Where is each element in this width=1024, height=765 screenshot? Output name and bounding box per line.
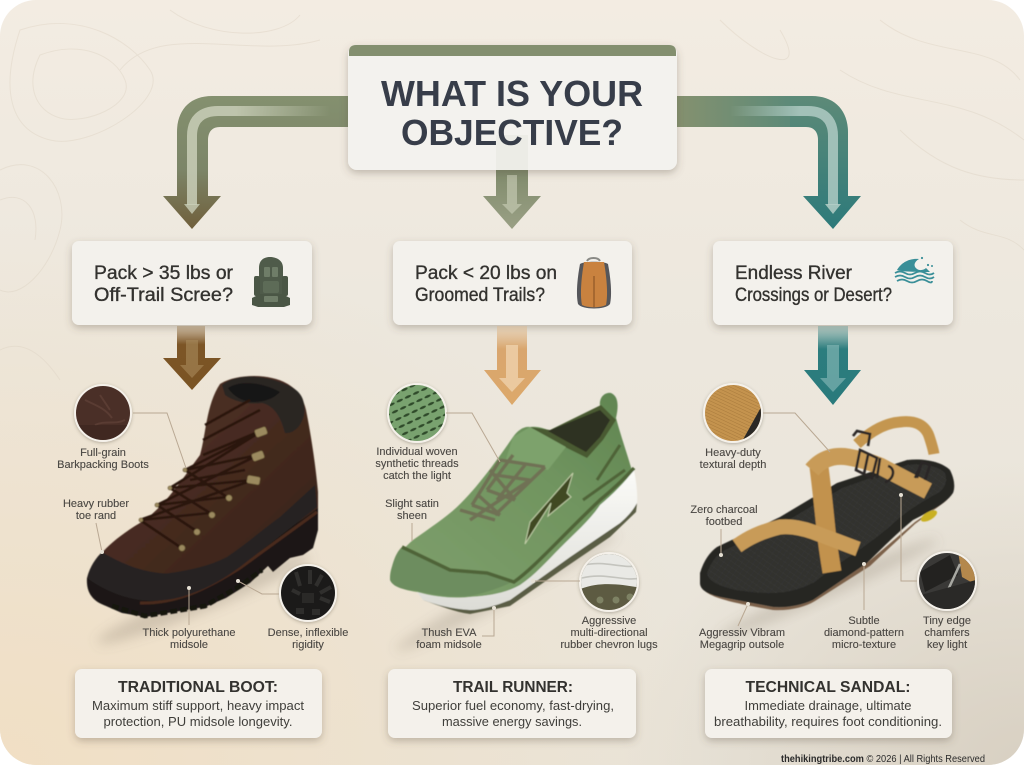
summary card: traditional boot <box>75 669 322 738</box>
title text: WHAT IS YOUR <box>381 73 643 114</box>
question card: heavy pack: Off-Trail Scree? <box>94 285 233 306</box>
detail circle: lugs and foam <box>578 550 642 614</box>
buckle <box>853 431 930 482</box>
boot callout labels: toe rand <box>76 510 116 522</box>
arrow: left branch <box>163 96 348 229</box>
question card: water or desert: Crossings or Desert? <box>735 285 892 306</box>
sandal illustration <box>700 422 954 645</box>
arrow: to trail runner <box>484 326 541 405</box>
heel strap <box>857 422 934 454</box>
tongue <box>505 427 566 470</box>
summary card: trail runner: TRAIL RUNNER: <box>453 679 573 696</box>
trail runner callout labels: foam midsole <box>416 639 482 651</box>
sandal callout labels: footbed <box>706 516 742 528</box>
trail runner callout labels: Slight satin <box>385 498 439 510</box>
boot callout labels: rigidity <box>292 639 324 651</box>
detail circle: leather <box>72 383 134 445</box>
upper <box>390 393 634 598</box>
boot illustration <box>87 376 318 653</box>
boot callout labels <box>57 447 348 651</box>
icon: teal wave <box>895 257 934 282</box>
arrow: centre branch <box>483 165 541 229</box>
leader lines <box>96 413 917 636</box>
sandal callout labels: Zero charcoal <box>690 504 758 516</box>
question card: light pack: Groomed Trails? <box>415 285 545 306</box>
arrow: to boot <box>163 326 221 390</box>
sandal callout labels: micro-texture <box>832 639 896 651</box>
outsole <box>701 496 953 610</box>
detail circle: webbing <box>703 383 765 445</box>
summary card: technical sandal: TECHNICAL SANDAL: <box>746 679 910 696</box>
sandal callout labels: textural depth <box>700 459 766 471</box>
question card: heavy pack <box>72 241 312 325</box>
question card: light pack: Pack < 20 lbs on <box>415 263 557 284</box>
title card <box>348 45 677 170</box>
collar <box>530 405 616 458</box>
boot callout labels: Full-grain <box>80 447 126 459</box>
trail runner callout labels: Thush EVA <box>422 627 477 639</box>
sandal callout labels: Aggressiv Vibram <box>699 627 785 639</box>
icon: orange backpack <box>577 258 611 308</box>
trail runner callout labels: synthetic threads <box>375 458 459 470</box>
summary card: technical sandal: breathability, requires foot conditioning. <box>714 714 942 729</box>
footer credit: thehikingtribe.com © 2026 | All Rights Reserved <box>781 754 985 765</box>
detail circle: woven mesh <box>385 380 449 446</box>
logo <box>919 508 939 524</box>
trail runner callout labels: multi-directional <box>570 627 648 639</box>
sandal callout labels: key light <box>927 639 967 651</box>
boot callout labels: midsole <box>170 639 208 651</box>
midsole <box>417 470 637 610</box>
title card: OBJECTIVE? <box>401 112 623 153</box>
trail runner callout labels: rubber chevron lugs <box>560 639 658 651</box>
sandal callout labels: Megagrip outsole <box>700 639 784 651</box>
boot callout labels: Thick polyurethane <box>143 627 235 639</box>
sandal callout labels: Tiny edge <box>923 615 971 627</box>
summary card: traditional boot: TRADITIONAL BOOT: <box>118 679 278 696</box>
footbed <box>700 459 954 607</box>
boot callout labels: Barkpacking Boots <box>57 459 149 471</box>
question card: heavy pack: Pack > 35 lbs or <box>94 263 234 284</box>
trail runner callout labels <box>375 446 658 651</box>
trail runner callout labels: sheen <box>397 510 427 522</box>
detail circle: edge chamfer <box>917 551 977 611</box>
laces <box>460 455 545 520</box>
icon: green backpack <box>252 257 290 307</box>
toe strap <box>737 527 858 549</box>
summary card: traditional boot: protection, PU midsole longevity. <box>104 714 292 729</box>
summary card: technical sandal: Immediate drainage, ultimate <box>744 698 912 713</box>
boot callout labels: Heavy rubber <box>63 498 129 510</box>
question card: water or desert: Endless River <box>735 263 853 284</box>
question card: light pack <box>393 241 632 325</box>
summary card: technical sandal <box>705 669 952 738</box>
summary card: trail runner: massive energy savings. <box>442 714 582 729</box>
summary card: trail runner <box>388 669 636 738</box>
sandal callout labels: chamfers <box>924 627 970 639</box>
logo <box>525 473 573 544</box>
toe bumper <box>390 547 512 597</box>
sole <box>87 505 318 617</box>
collar <box>222 377 304 433</box>
boot callout labels: Dense, inflexible <box>268 627 348 639</box>
arrow: right branch <box>677 96 861 229</box>
question card: water or desert <box>713 241 953 325</box>
summary card: trail runner: Superior fuel economy, fast-drying, <box>412 698 614 713</box>
arrow: to sandal <box>804 326 861 405</box>
sandal callout labels: Subtle <box>848 615 880 627</box>
sandal callout labels: diamond-pattern <box>824 627 904 639</box>
sandal callout labels: Heavy-duty <box>705 447 761 459</box>
summary card: traditional boot: Maximum stiff support, heavy impact <box>92 698 304 713</box>
trail runner callout labels: Individual woven <box>376 446 458 458</box>
trail runner illustration <box>390 393 637 659</box>
upper <box>90 376 318 588</box>
outsole <box>423 503 637 614</box>
laces and hooks <box>140 400 260 547</box>
heel stripes <box>583 445 625 500</box>
instep strap <box>812 456 928 491</box>
rubber toe rand <box>87 485 317 601</box>
sandal callout labels <box>690 447 971 651</box>
trail runner callout labels: catch the light <box>383 470 451 482</box>
detail circle: outsole lugs <box>277 563 339 625</box>
trail runner callout labels: Aggressive <box>582 615 636 627</box>
cross strap <box>819 467 832 572</box>
